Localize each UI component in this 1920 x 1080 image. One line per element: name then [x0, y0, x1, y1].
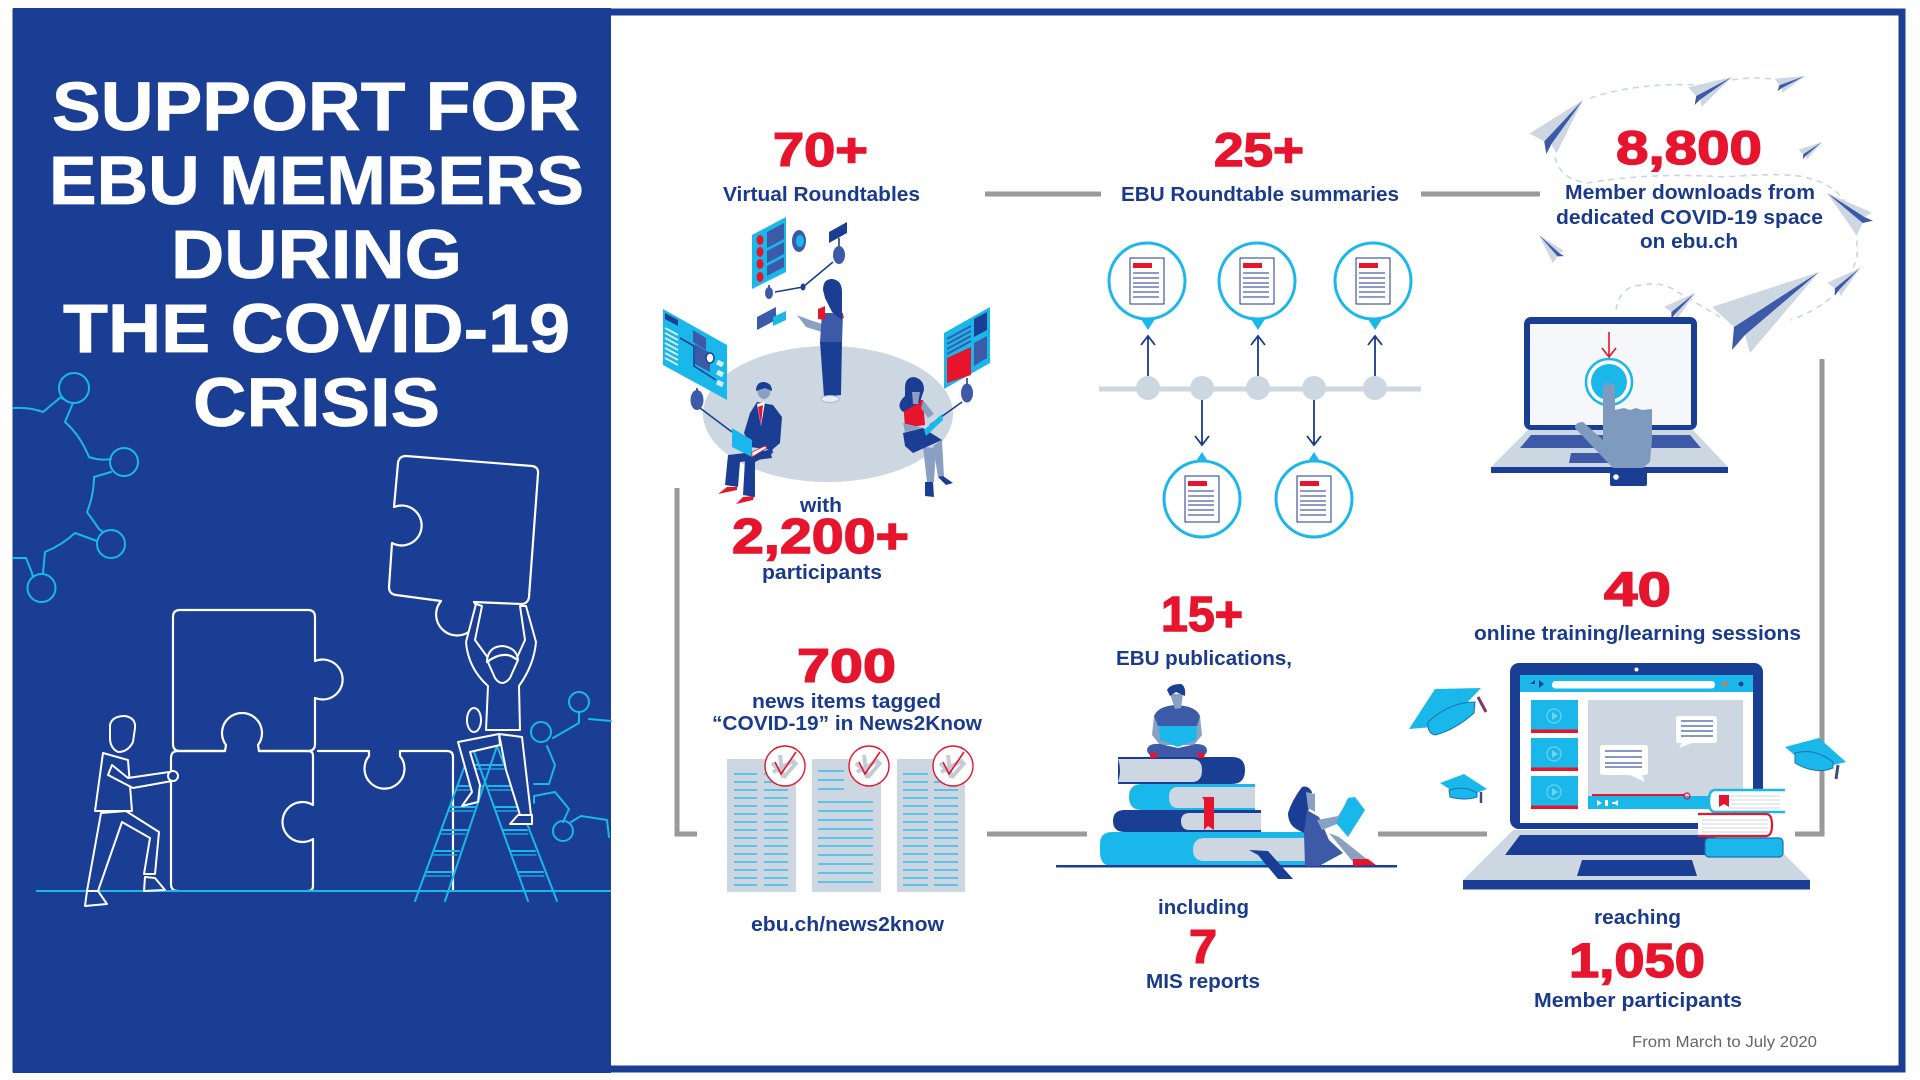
stat: 700 news items: 700 [797, 639, 896, 692]
stat: 700 news items: news items tagged [752, 690, 941, 713]
date note: From March to July 2020 [1632, 1034, 1817, 1051]
title: CRISIS [193, 364, 440, 441]
diagram: roundtable summaries timeline [1099, 243, 1421, 537]
badge: virus check 3 [933, 746, 973, 786]
illustration: virtual roundtable [663, 217, 990, 504]
document column 2 [812, 759, 881, 892]
laptop screen [1510, 663, 1763, 829]
badge: virus check 1 [765, 746, 805, 786]
chat bubbles [1600, 716, 1717, 782]
figure: man pushing [85, 716, 178, 906]
title [49, 68, 584, 441]
puzzle piece: lower left [171, 751, 313, 891]
stat: 700 news items: “COVID-19” in News2Know [712, 712, 982, 735]
icon: virus outline left [13, 373, 138, 602]
stat: 8,800 member downloads: Member downloads from [1565, 181, 1815, 204]
title: DURING [171, 216, 462, 293]
video thumbnails [1531, 700, 1578, 809]
stat: 8,800 member downloads: on ebu.ch [1640, 230, 1738, 253]
stat: with 2,200+ participants: participants [762, 561, 882, 584]
stat: 70+ virtual roundtables [723, 123, 920, 206]
figure: ladder [415, 746, 557, 901]
panel: left title panel [13, 8, 611, 1073]
stat: 8,800 member downloads: 8,800 [1616, 121, 1762, 174]
stat: with 2,200+ participants: 2,200+ [732, 510, 909, 564]
stat: 8,800 member downloads: dedicated COVID-19 space [1556, 206, 1823, 229]
title: SUPPORT FOR [52, 68, 580, 145]
graduation cap small [1440, 774, 1487, 803]
illustration: laptop with online course [1409, 663, 1846, 890]
top floating panel [752, 217, 847, 330]
stacked books [1698, 790, 1785, 857]
stat: with 2,200+ participants: with [799, 494, 842, 517]
link: ebu.ch/news2know: ebu.ch/news2know [751, 913, 944, 936]
document bubble 2 [1219, 243, 1295, 319]
badge: virus check 2 [849, 746, 889, 786]
ribbon [1249, 850, 1293, 879]
woman reading [1288, 787, 1376, 866]
document bubble 1 [1109, 243, 1185, 319]
puzzle piece: floating [389, 456, 538, 635]
stat: 40 online training sessions: 40 [1604, 564, 1671, 617]
puzzle piece: upper left [173, 610, 343, 751]
stat: 25+ EBU roundtable summaries: EBU Roundtable summaries [1121, 183, 1399, 206]
paper planes with dashed flight paths [1525, 70, 1877, 353]
stat: 15+ EBU publications: EBU publications, [1116, 647, 1292, 670]
pointing hand [1575, 383, 1652, 468]
graduation cap right [1785, 738, 1846, 779]
title: EBU MEMBERS [49, 142, 584, 219]
puzzle piece: lower right [318, 751, 453, 891]
document column 3 [897, 759, 965, 892]
stat: including 7 MIS reports: MIS reports [1146, 970, 1260, 993]
reader sitting on books [1147, 684, 1207, 758]
stat: 70+ virtual roundtables: Virtual Roundtables [723, 183, 920, 206]
stat: 25+ EBU roundtable summaries [1121, 123, 1399, 206]
laptop base [1463, 830, 1810, 890]
seated woman with tablet [899, 377, 953, 497]
stat: 25+ EBU roundtable summaries: 25+ [1214, 123, 1304, 176]
illustration: tagged news documents [727, 746, 973, 892]
standing woman [797, 279, 844, 402]
stat: 15+ EBU publications: 15+ [1161, 588, 1243, 642]
bookmark [1202, 797, 1214, 830]
stat: 15+ EBU publications [1116, 588, 1292, 670]
stat: reaching 1,050 member participants: 1,050 [1569, 935, 1705, 988]
stat: 40 online training sessions: online training/learning sessions [1474, 622, 1801, 645]
third book [1129, 784, 1255, 810]
seated man with laptop [718, 382, 782, 504]
illustration: laptop with download button [1491, 317, 1728, 486]
document bubble 4 [1164, 461, 1240, 537]
top book [1118, 757, 1245, 784]
document bubble 5 [1276, 461, 1352, 537]
stat: 70+ virtual roundtables: 70+ [773, 123, 868, 176]
bottom book [1100, 832, 1310, 866]
document bubble 3 [1335, 243, 1411, 319]
stat: reaching 1,050 member participants [1534, 906, 1742, 1012]
stat: with 2,200+ participants [732, 494, 909, 584]
stat: 8,800 member downloads [1556, 121, 1823, 253]
graduation cap large [1409, 688, 1486, 735]
stat: including 7 MIS reports: 7 [1189, 920, 1217, 973]
stat: reaching 1,050 member participants: reaching [1594, 906, 1681, 929]
stat: reaching 1,050 member participants: Member participants [1534, 989, 1742, 1012]
illustration: stack of books with readers [1056, 684, 1397, 879]
stat: including 7 MIS reports [1146, 896, 1260, 993]
stat: 700 news items [712, 639, 982, 735]
stat: including 7 MIS reports: including [1158, 896, 1249, 919]
ground line [36, 890, 611, 892]
document column 1 [727, 759, 796, 892]
stat: 40 online training sessions [1474, 564, 1801, 645]
icon: virus outline right [531, 692, 611, 841]
connector lines [677, 194, 1822, 834]
right floating panel [930, 307, 990, 425]
figure: man lifting [458, 604, 536, 824]
left floating panel [663, 309, 732, 432]
title: THE COVID-19 [63, 290, 570, 367]
second book [1113, 810, 1261, 832]
